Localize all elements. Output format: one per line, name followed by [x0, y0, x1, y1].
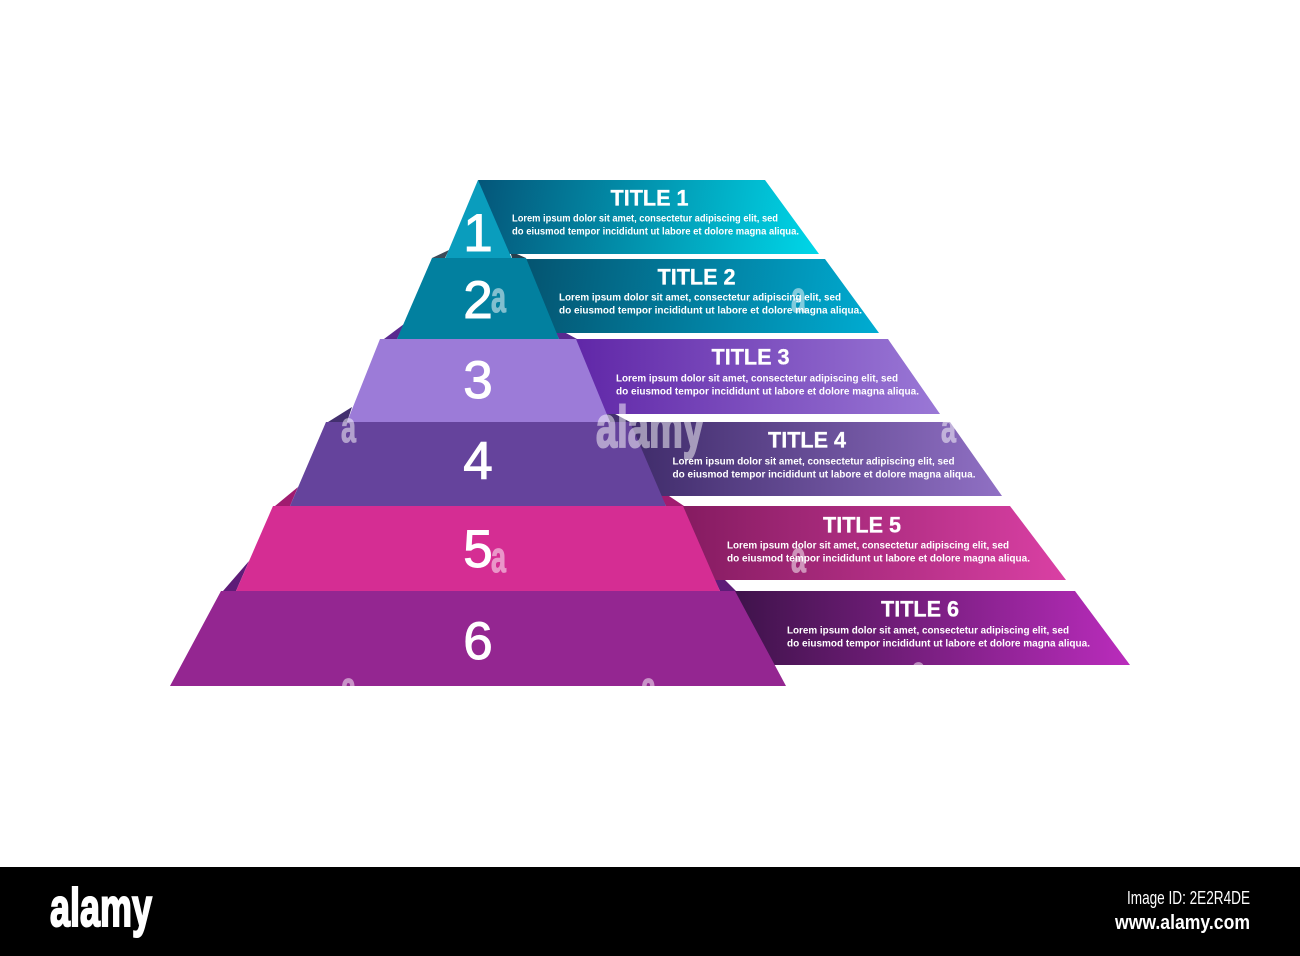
number 6: 6: [463, 612, 493, 671]
panel 1 text: do eiusmod tempor incididunt ut labore et dolore magna aliqua.: [512, 226, 799, 238]
watermark marks: a: [791, 533, 806, 582]
panel 6 text: TITLE 6: [881, 596, 959, 622]
footer logo: alamy: [50, 878, 152, 938]
panel 6 text: Lorem ipsum dolor sit amet, consectetur adipiscing elit, sed: [787, 624, 1069, 636]
footer image id: Image ID: 2E2R4DE: [1127, 888, 1250, 908]
panel 2 background: [515, 259, 879, 333]
watermark marks: a: [911, 647, 926, 696]
pyramid tier 4: [290, 422, 666, 506]
panel 2 text: TITLE 2: [658, 264, 736, 290]
footer bar: [0, 867, 1300, 956]
watermark marks: a: [641, 663, 656, 712]
watermark marks: a: [491, 273, 506, 322]
panel 3 text: TITLE 3: [712, 344, 790, 370]
panel 3 text: [616, 344, 919, 398]
panel 1 text: [512, 186, 799, 238]
panel 5 text: TITLE 5: [823, 512, 901, 538]
number 2: 2: [463, 271, 493, 330]
panel 3 text: Lorem ipsum dolor sit amet, consectetur adipiscing elit, sed: [616, 372, 898, 384]
panel 2 text: Lorem ipsum dolor sit amet, consectetur adipiscing elit, sed: [559, 292, 841, 304]
panel 4 text: TITLE 4: [768, 428, 847, 452]
panel 4 text: [672, 428, 976, 480]
pyramid tier 2: [397, 258, 559, 339]
panel 2 text: do eiusmod tempor incididunt ut labore et dolore magna aliqua.: [559, 304, 862, 316]
watermark marks: a: [341, 663, 356, 712]
panel 5 text: do eiusmod tempor incididunt ut labore et dolore magna aliqua.: [727, 552, 1030, 564]
panel 3 background: [570, 339, 940, 414]
panel 5 text: [727, 512, 1030, 564]
pyramid tier 1: [445, 180, 512, 259]
panel 4 text: do eiusmod tempor incididunt ut labore et dolore magna aliqua.: [672, 468, 976, 480]
central watermark: alamy: [596, 395, 704, 460]
watermark marks: a: [791, 273, 806, 322]
pyramid tier 3: [347, 339, 610, 422]
panel 6 background: [730, 591, 1130, 665]
number 4: 4: [463, 432, 493, 491]
watermark marks: a: [491, 533, 506, 582]
panel 4 background: [625, 422, 1002, 496]
panel 1 text: TITLE 1: [610, 186, 688, 210]
pyramid tier 6: [170, 591, 786, 686]
tier shadows: [223, 250, 736, 591]
footer url: www.alamy.com: [1114, 912, 1250, 934]
panel 6 text: [787, 596, 1090, 650]
panel 6 text: do eiusmod tempor incididunt ut labore et dolore magna aliqua.: [787, 638, 1090, 650]
panel 4 text: Lorem ipsum dolor sit amet, consectetur adipiscing elit, sed: [672, 456, 954, 468]
number 3: 3: [463, 351, 493, 410]
number 5: 5: [463, 520, 493, 579]
number 1: 1: [463, 204, 493, 263]
panel 3 text: do eiusmod tempor incididunt ut labore et dolore magna aliqua.: [616, 386, 919, 398]
watermark marks: a: [941, 403, 956, 452]
panel 1 background: [478, 180, 819, 254]
panel 5 background: [680, 506, 1066, 580]
pyramid tier 5: [236, 506, 720, 591]
panel 1 text: Lorem ipsum dolor sit amet, consectetur adipiscing elit, sed: [512, 212, 778, 224]
panel 2 text: [559, 264, 862, 316]
watermark marks: [341, 273, 956, 712]
watermark marks: a: [341, 403, 356, 452]
panel 5 text: Lorem ipsum dolor sit amet, consectetur adipiscing elit, sed: [727, 540, 1009, 552]
